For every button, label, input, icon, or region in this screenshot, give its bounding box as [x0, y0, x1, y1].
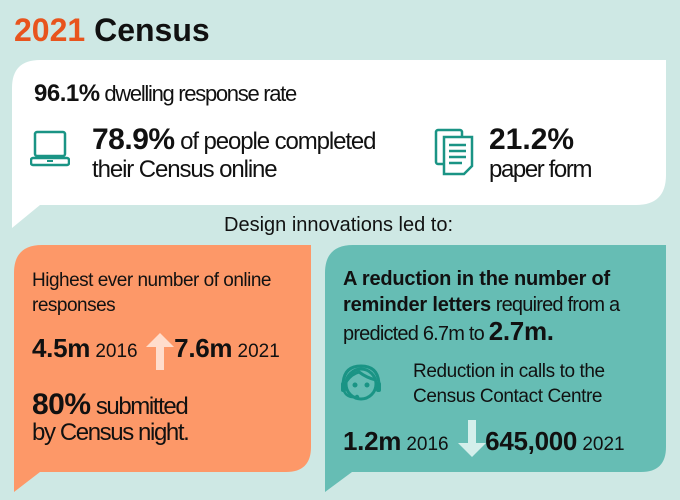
- text: dwelling response: 96.1% dwelling response rate: [34, 80, 296, 107]
- text: calls: Census Contact Centre: [413, 386, 602, 407]
- text: reminder letters: predicted 6.7m to 2.7m.: [343, 316, 554, 346]
- icon: down arrow: [458, 420, 486, 457]
- text: paper: paper form: [489, 156, 591, 183]
- text: online: 78.9% of people completed: [92, 123, 375, 156]
- panel: white bubble: [12, 60, 666, 228]
- panel: teal bubble: [325, 245, 666, 492]
- icon: up arrow: [146, 333, 174, 370]
- text: paper: [489, 123, 591, 183]
- text: online responses: responses: [32, 295, 115, 316]
- panel: orange bubble: [14, 245, 311, 492]
- text: calls: Reduction in calls to the: [413, 361, 605, 382]
- text: online responses: [32, 270, 271, 316]
- text: reminder letters: reminder letters required from a: [343, 294, 619, 316]
- stat: 80%: [32, 388, 188, 446]
- icon: laptop: [30, 130, 70, 166]
- stat: 1.2m to 645,000: 1.2m 2016 645,000 2021: [343, 426, 625, 456]
- stat: 80%: by Census night.: [32, 419, 188, 446]
- text: online: their Census online: [92, 156, 277, 183]
- text: reminder letters: A reduction in the number of: [343, 268, 610, 290]
- text: reminder letters: [343, 268, 620, 346]
- text: calls: [413, 361, 605, 407]
- stat: 80%: 80% submitted: [32, 388, 187, 421]
- icon: paper form: [434, 128, 474, 176]
- icon: contact centre headset: [341, 364, 381, 400]
- title: 2021 Census: [14, 12, 210, 48]
- text: online: [92, 123, 375, 183]
- heading: design innovations: Design innovations led to:: [224, 214, 453, 236]
- text: paper: 21.2%: [489, 123, 574, 156]
- text: online responses: Highest ever number of online: [32, 270, 271, 291]
- stat: 4.5m to 7.6m: 4.5m 2016 7.6m 2021: [32, 333, 280, 363]
